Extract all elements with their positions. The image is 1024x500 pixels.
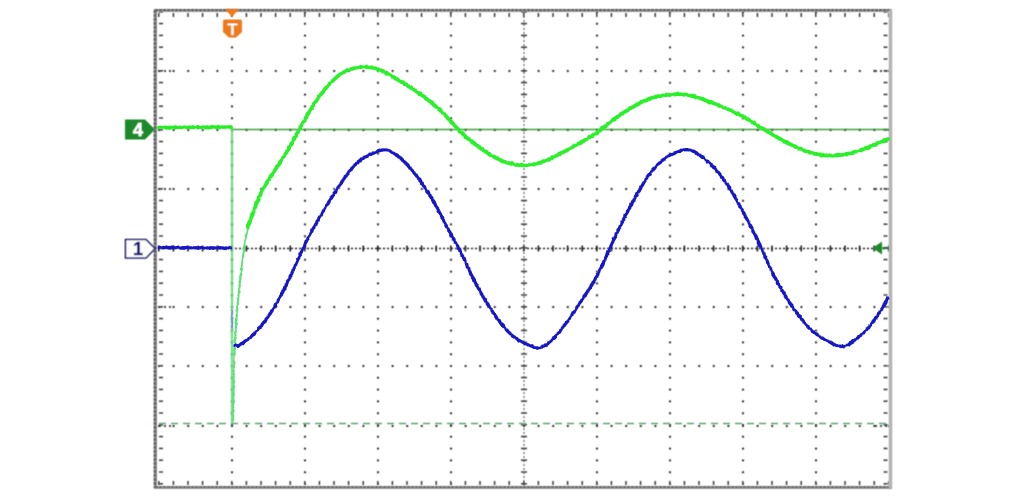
channel 4 marker <box>125 120 155 140</box>
channel 4 ground arrow <box>872 242 889 254</box>
graticule grid <box>158 11 889 486</box>
channel 1 marker: 1 <box>133 239 143 259</box>
channel 4 reference lines <box>159 128 889 424</box>
channel 4 marker: 4 <box>133 120 143 140</box>
channel 1 marker <box>126 239 155 259</box>
channel 4 waveform (green) <box>159 67 888 420</box>
instrument frame <box>155 10 890 488</box>
channel 1 waveform (blue) <box>159 150 888 348</box>
trigger marker T: T <box>227 20 238 39</box>
trigger marker T <box>223 9 242 39</box>
